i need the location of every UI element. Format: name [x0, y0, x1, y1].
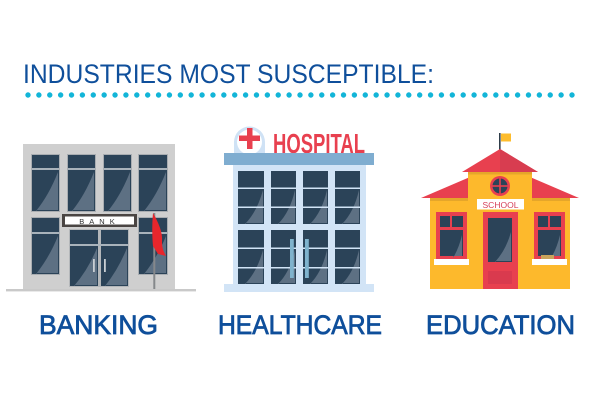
hospital upper windows — [238, 171, 360, 224]
label: banking: BANKING — [39, 310, 158, 340]
hospital lower windows and doors — [238, 230, 360, 284]
hospital cross emblem — [234, 127, 265, 154]
school right window — [532, 212, 567, 265]
title: INDUSTRIES MOST SUSCEPTIBLE: — [23, 59, 434, 89]
panel: banking — [6, 144, 196, 340]
school flag — [499, 133, 511, 150]
bank building — [6, 144, 196, 291]
panel: healthcare — [218, 127, 382, 340]
bank sign: BANK — [79, 217, 120, 226]
school side roof — [421, 177, 579, 198]
bank doors — [69, 229, 129, 287]
school top roof — [462, 149, 538, 172]
hospital sign: HOSPITAL — [273, 128, 365, 159]
bank sign — [62, 214, 137, 227]
label: education: EDUCATION — [426, 310, 575, 340]
school left window — [434, 212, 469, 265]
school sign — [477, 199, 524, 210]
bank flag — [152, 213, 166, 289]
school building — [421, 133, 579, 289]
panel: education — [421, 133, 579, 340]
bank upper windows — [31, 154, 168, 212]
school round window — [490, 176, 510, 196]
label: healthcare: HEALTHCARE — [218, 310, 382, 340]
school door — [483, 212, 518, 289]
hospital building — [224, 127, 374, 292]
school sign: SCHOOL — [482, 201, 519, 210]
bank lower windows — [31, 217, 168, 275]
